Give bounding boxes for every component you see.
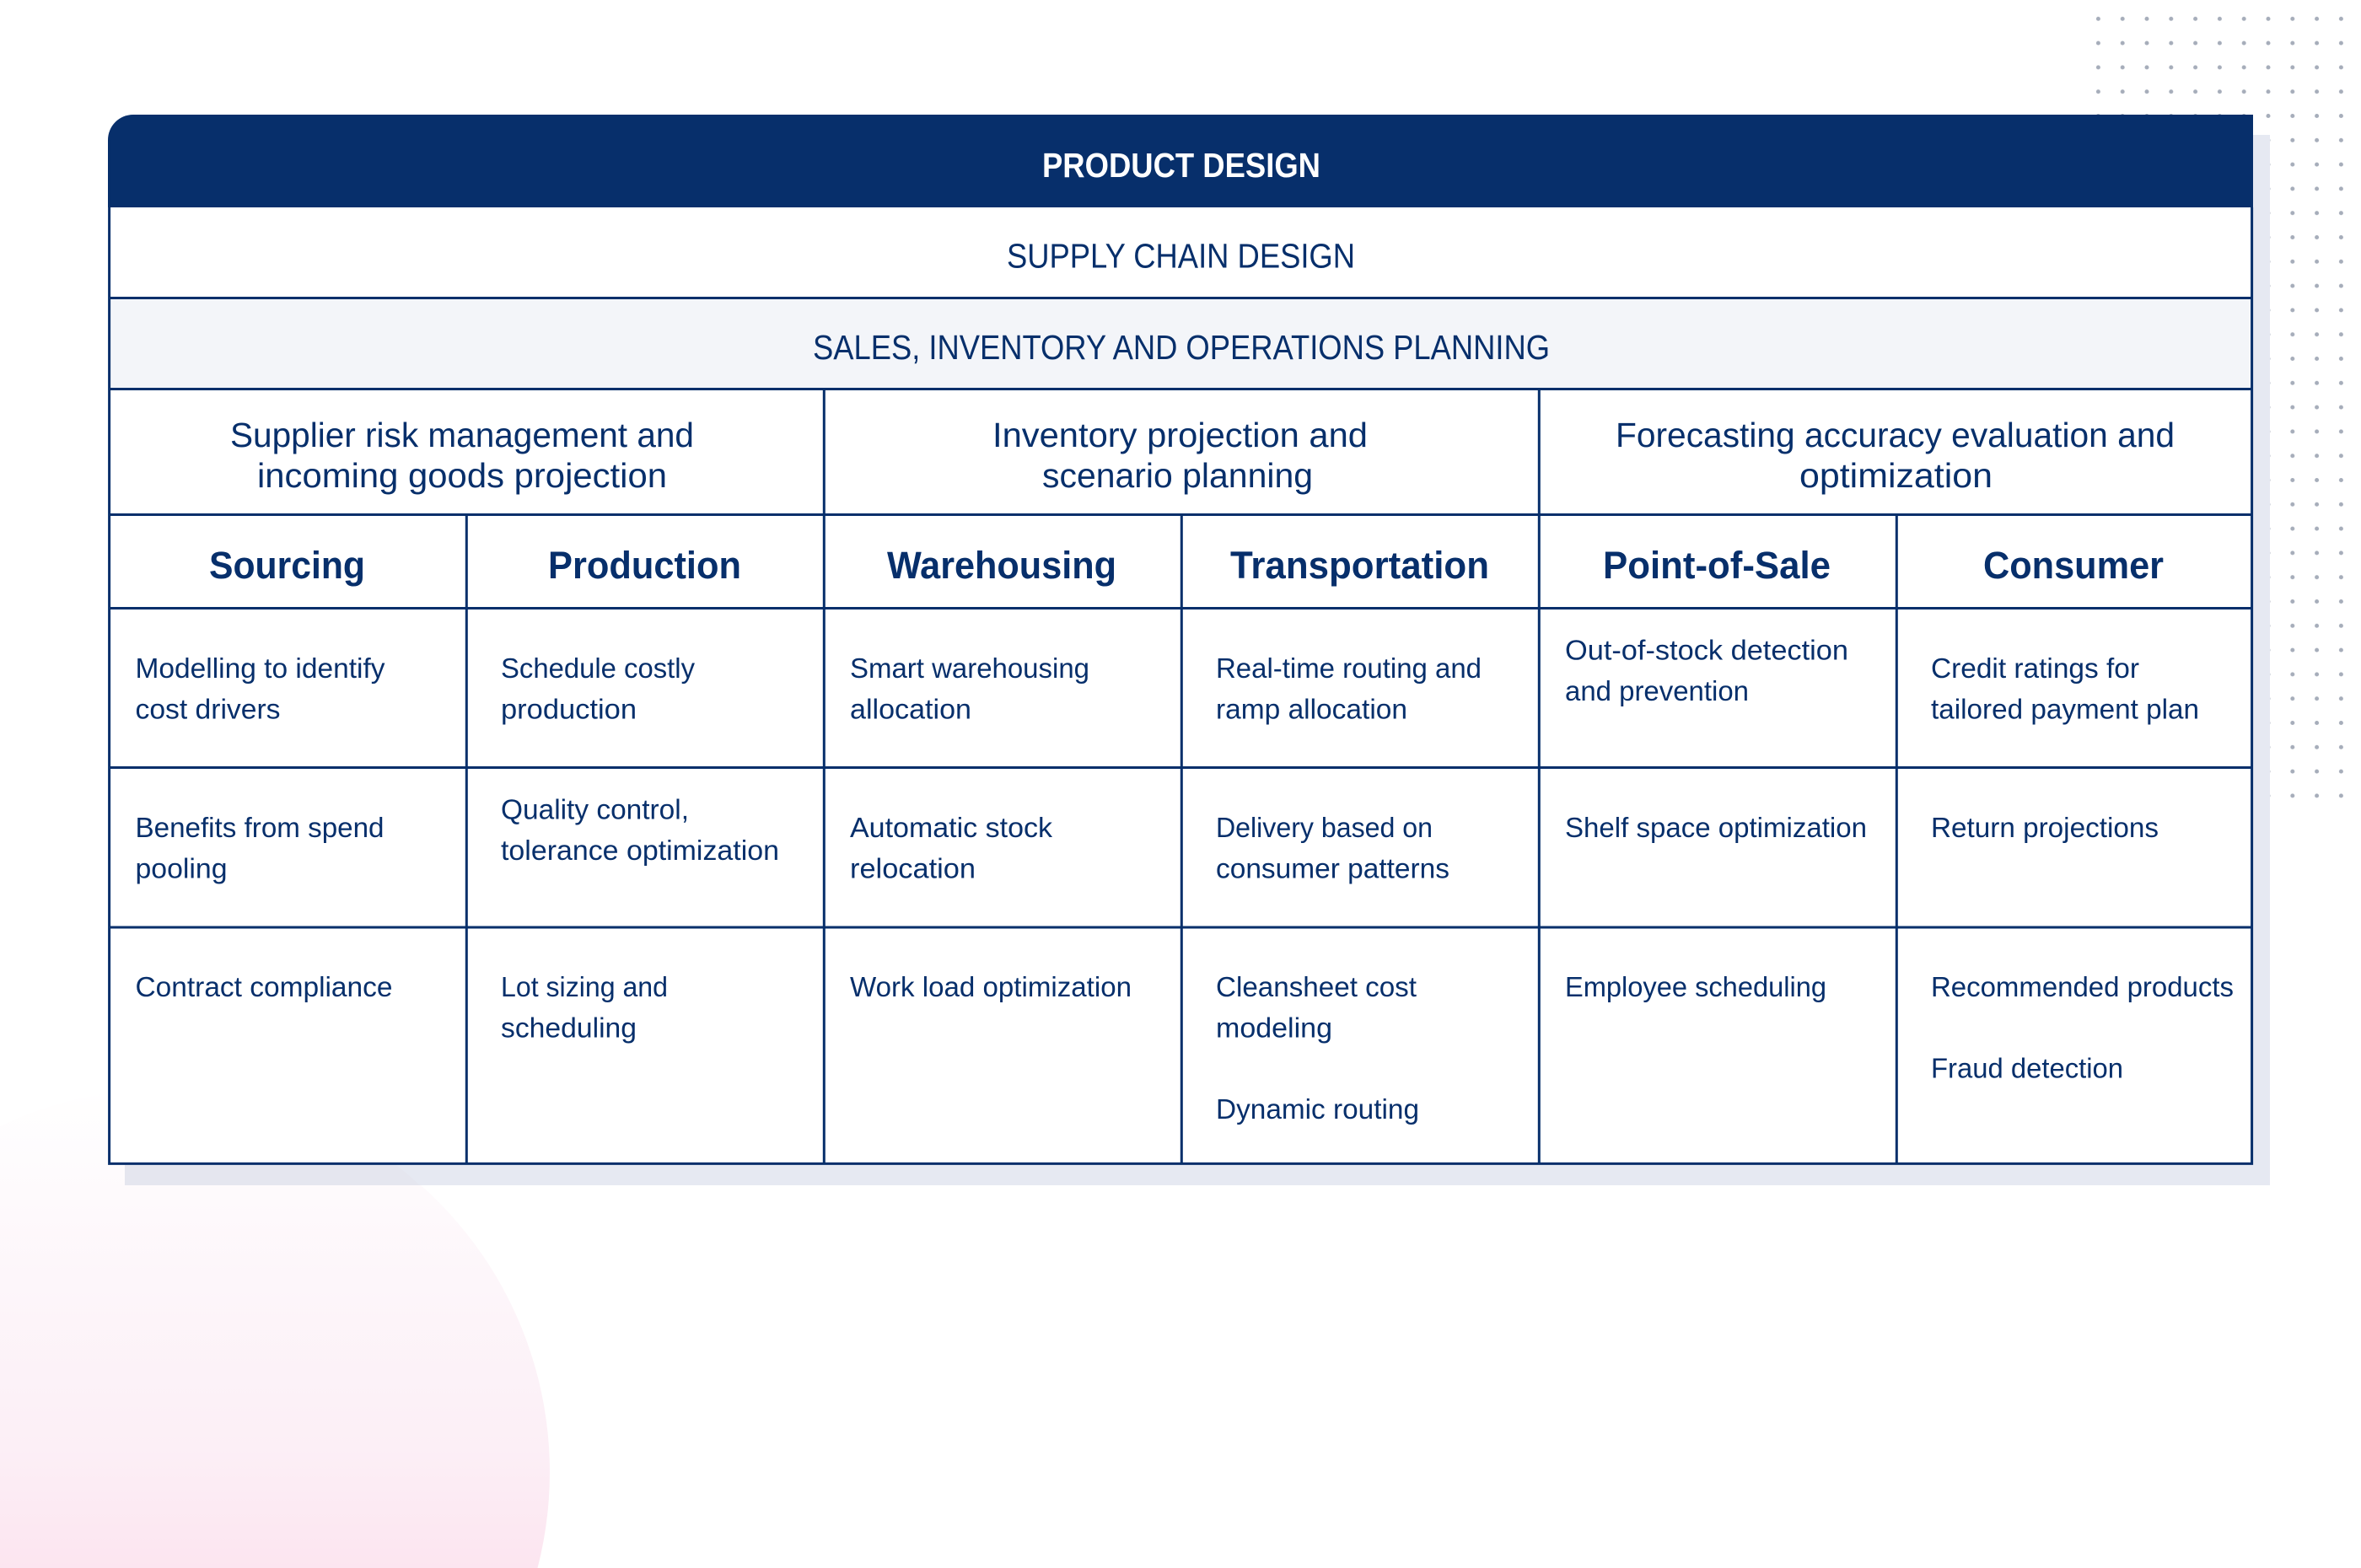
warehousing cell 2 <box>850 812 1053 883</box>
transportation cell 1: Real-time routing and <box>1216 652 1482 684</box>
decorative dot grid <box>2086 7 2353 808</box>
transportation cell 3: Cleansheet cost <box>1216 971 1417 1002</box>
planning cell: supplier risk: incoming goods projection <box>257 456 667 495</box>
planning cell: supplier risk: Supplier risk management and <box>230 416 694 454</box>
table drop shadow <box>125 135 2270 1185</box>
production cell 2: tolerance optimization <box>501 835 779 866</box>
decorative pink circle <box>0 1088 550 1568</box>
production cell 3: scheduling <box>501 1012 637 1044</box>
band: sales, inventory and operations planning <box>110 299 2251 388</box>
transportation cell 3: modeling <box>1216 1012 1332 1044</box>
sourcing cell 2 <box>135 812 385 883</box>
sourcing cell 1: Modelling to identify <box>135 652 385 684</box>
band: sales, inventory and operations planning: SALES, INVENTORY AND OPERATIONS PLANNING <box>813 328 1550 367</box>
production cell 1: production <box>501 693 637 725</box>
column heading: warehousing: Warehousing <box>887 544 1116 587</box>
sourcing cell 2: Benefits from spend <box>135 812 385 843</box>
production cell 2: Quality control, <box>501 794 689 824</box>
consumer cell 1 <box>1931 652 2199 725</box>
point-of-sale cell 2: Shelf space optimization <box>1565 812 1867 843</box>
warehousing cell 2: relocation <box>850 853 976 883</box>
planning cell: forecasting accuracy: Forecasting accuracy evaluation and <box>1616 416 2175 454</box>
band: supply chain design <box>110 207 2251 297</box>
point-of-sale cell 3: Employee scheduling <box>1565 971 1826 1002</box>
warehousing cell 1: Smart warehousing <box>850 652 1089 684</box>
panel: matrix table <box>108 115 2253 1165</box>
sourcing cell 1: cost drivers <box>135 693 280 725</box>
band: supply chain design: SUPPLY CHAIN DESIGN <box>1007 236 1355 275</box>
heading: product design <box>108 115 2253 207</box>
sourcing cell 2: pooling <box>135 853 228 883</box>
consumer cell 2: Return projections <box>1931 812 2159 843</box>
transportation cell 3 <box>1216 971 1419 1125</box>
production cell 3: Lot sizing and <box>501 971 668 1002</box>
consumer cell 3: Recommended products <box>1931 971 2234 1002</box>
column heading: sourcing: Sourcing <box>209 544 365 587</box>
table background <box>108 115 2253 1165</box>
production cell 1: Schedule costly <box>501 652 695 684</box>
consumer cell 3: Fraud detection <box>1931 1052 2123 1084</box>
warehousing cell 2: Automatic stock <box>850 812 1053 843</box>
planning cell: supplier risk <box>230 416 694 495</box>
warehousing cell 1 <box>850 652 1089 725</box>
warehousing cell 1: allocation <box>850 693 971 725</box>
production cell 1 <box>501 652 695 725</box>
column heading: transportation: Transportation <box>1230 544 1489 587</box>
column heading: production: Production <box>548 544 741 587</box>
warehousing cell 3: Work load optimization <box>850 971 1132 1002</box>
point-of-sale cell 1: and prevention <box>1565 675 1749 706</box>
planning cell: forecasting accuracy <box>1616 416 2175 495</box>
sourcing cell 1 <box>135 652 385 725</box>
transportation cell 3: Dynamic routing <box>1216 1093 1419 1125</box>
sourcing cell 3: Contract compliance <box>135 971 393 1002</box>
planning cell: inventory projection <box>992 416 1368 495</box>
transportation cell 1: ramp allocation <box>1216 693 1407 725</box>
table grid lines <box>110 140 2252 1163</box>
point-of-sale cell 1 <box>1565 634 1848 706</box>
transportation cell 1 <box>1216 652 1482 725</box>
production cell 2 <box>501 794 779 866</box>
transportation cell 2: consumer patterns <box>1216 853 1449 883</box>
consumer cell 1: Credit ratings for <box>1931 652 2139 684</box>
heading: product design: PRODUCT DESIGN <box>1042 146 1320 185</box>
planning cell: forecasting accuracy: optimization <box>1799 456 1993 495</box>
consumer cell 3 <box>1931 971 2234 1084</box>
production cell 3 <box>501 971 668 1044</box>
transportation cell 2 <box>1216 812 1449 883</box>
consumer cell 1: tailored payment plan <box>1931 693 2199 725</box>
planning cell: inventory projection: scenario planning <box>1042 456 1313 495</box>
planning cell: inventory projection: Inventory projection and <box>992 416 1368 454</box>
transportation cell 2: Delivery based on <box>1216 812 1433 843</box>
column heading: point-of-sale: Point-of-Sale <box>1603 544 1831 587</box>
point-of-sale cell 1: Out-of-stock detection <box>1565 634 1848 666</box>
column heading: consumer: Consumer <box>1983 544 2164 587</box>
